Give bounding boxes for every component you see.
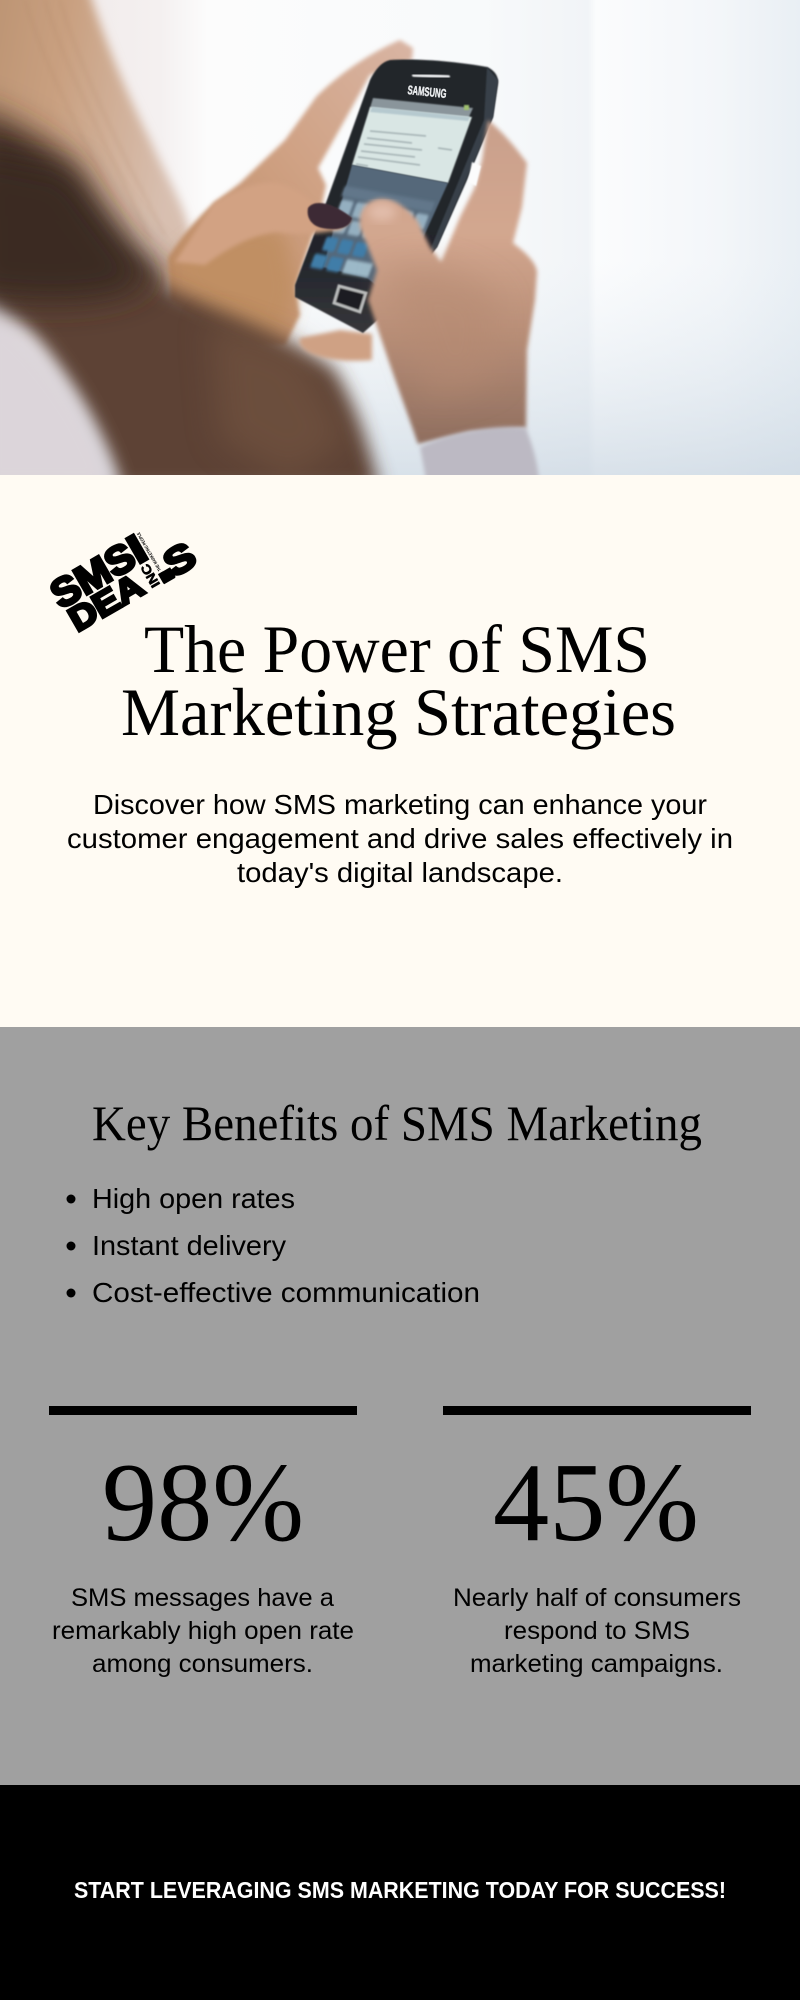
panel: key benefits and statistics (0, 1027, 800, 1786)
right hand fingers (360, 120, 537, 444)
intro text: Discover how SMS marketing can enhance your (93, 789, 707, 820)
benefits list: High open rates (92, 1183, 295, 1214)
logo: SMS Deals Inc: SMS (43, 534, 143, 617)
left hand palm (168, 40, 413, 345)
intro text (67, 789, 733, 888)
benefits list: Instant delivery (92, 1230, 286, 1261)
heading: key benefits: Key Benefits of SMS Marketing (92, 1095, 702, 1151)
stat: 98 percent: remarkably high open rate (52, 1617, 354, 1645)
logo: SMS Deals Inc: DEA (62, 566, 150, 639)
stat: 45 percent: respond to SMS (504, 1617, 690, 1645)
stat: 98 percent: 98% (102, 1441, 304, 1565)
stat: 45 percent: Nearly half of consumers (453, 1584, 741, 1612)
title (121, 611, 676, 750)
title: The Power of SMS (144, 611, 650, 687)
intro text: customer engagement and drive sales effectively in (67, 823, 733, 854)
left thumb and nail (175, 182, 352, 265)
logo: SMS Deals Inc: INC (137, 561, 163, 590)
title: Marketing Strategies (121, 674, 676, 750)
logo: SMS Deals Inc: THE MARKETING PEOPLE (136, 531, 162, 572)
stat: 45 percent: marketing campaigns. (470, 1650, 723, 1678)
stat: 98 percent: among consumers. (92, 1650, 313, 1678)
photo: hands holding a smartphone (0, 0, 800, 490)
lower thumb behind phone (300, 330, 372, 361)
benefits list: Cost-effective communication (92, 1277, 480, 1308)
panel: call to action footer (0, 1785, 800, 2000)
panel: intro on cream (43, 508, 733, 888)
logo: SMS Deals Inc: S (156, 535, 203, 586)
icon: smartphone (295, 59, 498, 333)
logo: SMS Deals Inc (43, 508, 203, 643)
shirt sleeve cuff (418, 424, 540, 475)
stat: 45 percent: 45% (493, 1441, 699, 1565)
stat: 98 percent: SMS messages have a (71, 1584, 334, 1612)
phone brand: SAMSUNG (407, 83, 447, 101)
logo: SMS Deals Inc: L (157, 566, 177, 587)
intro text: today's digital landscape. (237, 857, 563, 888)
arm and sleeve (0, 268, 392, 475)
stat: 45 percent (443, 1406, 751, 1678)
call to action text: START LEVERAGING SMS MARKETING TODAY FOR SUCCESS! (74, 1877, 726, 1903)
benefits list (66, 1183, 480, 1308)
stat: 98 percent (49, 1406, 357, 1678)
